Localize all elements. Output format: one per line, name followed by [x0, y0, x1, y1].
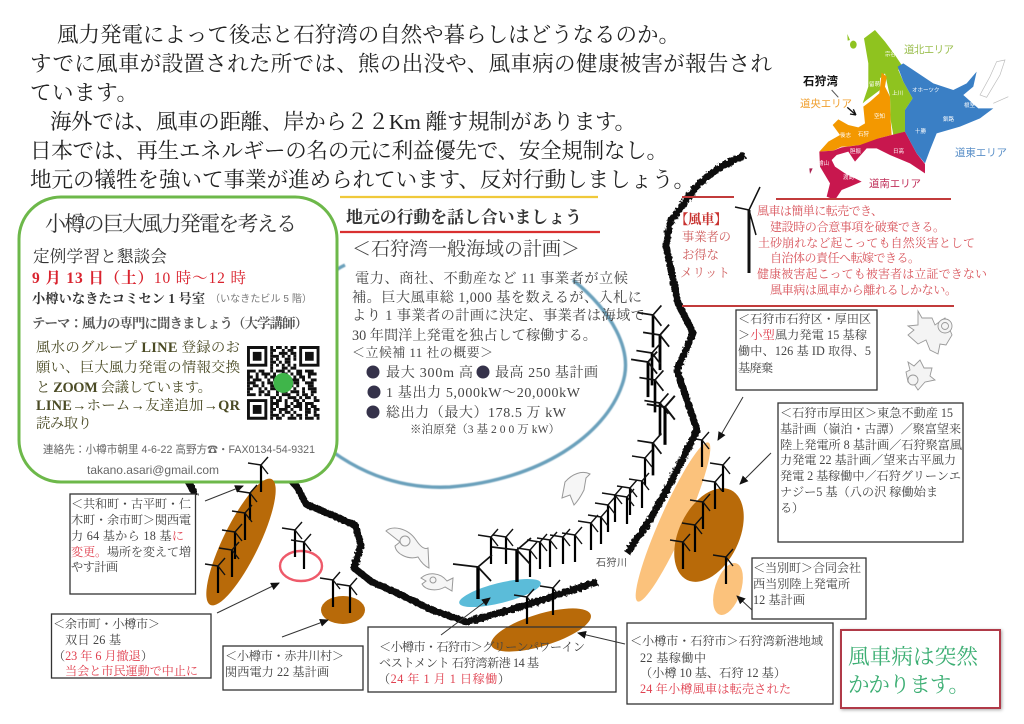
- list: candidate overview bullets: 総出力（最大）178.5 万 kW: [386, 404, 567, 421]
- wind turbines: rows of turbine glyphs: [205, 305, 733, 624]
- callout: Atsuta ward plans: 基計画（嶺泊・古譚）／聚富望来: [780, 421, 961, 436]
- text: merit label: 【風車】: [675, 211, 727, 227]
- map: Hokkaido areas: 留萌: [869, 80, 881, 88]
- text: merit details: 風車病は風車から離れるしかない。: [770, 282, 957, 297]
- callout: Atsuta ward plans: 力発電 22 基計画／望来古平風力: [780, 452, 956, 467]
- callout: Kyowa, Furubira, Niki, Yoichi: やす計画: [71, 559, 118, 574]
- text: LINE group invitation: 願い、巨大風力発電の情報交換: [36, 358, 241, 376]
- callout: Atsuta ward plans: ＜石狩市厚田区＞東急不動産 15: [780, 405, 953, 420]
- list: candidate overview bullets: 最大 300m 高: [386, 364, 473, 381]
- text: contact details: [43, 443, 315, 477]
- callout: Atsuta ward plans: [778, 403, 963, 542]
- text: merit details: 風車は簡単に転売でき、: [757, 203, 883, 218]
- map: Hokkaido areas: [800, 30, 1008, 200]
- callout: Tobetsu: 12 基計画: [753, 592, 805, 607]
- list: candidate overview bullets: [366, 364, 598, 436]
- text: contact details: 連絡先：小樽市朝里 4-6-22 高野方☎・FAX0134-54-9321: [43, 443, 315, 456]
- callout: Tobetsu: [752, 558, 866, 619]
- text: contact details: takano.asari@gmail.com: [87, 463, 219, 477]
- map: Hokkaido areas: 日高: [893, 147, 905, 155]
- map: Hokkaido areas: 上川: [892, 89, 903, 97]
- text: plan description: 電力、商社、不動産など 11 事業者が立候: [355, 270, 628, 287]
- heading text: intro statement: 海外では、風車の距離、岸から２２Km 離す規制があります。: [50, 110, 636, 134]
- text: LINE group invitation: 読み取り: [36, 414, 92, 432]
- text: plan description: 補。巨大風車総 1,000 基を数えるが、入札に: [352, 289, 642, 306]
- map: Hokkaido areas: 宗谷: [885, 50, 897, 58]
- callout: Kyowa, Furubira, Niki, Yoichi: 木町・余市町＞関西電: [71, 512, 191, 527]
- map: Hokkaido areas: オホーツク: [912, 87, 939, 94]
- area ellipses: brown existing and planned zones: [194, 437, 758, 661]
- callout: Tobetsu: 西当別陸上発電所: [753, 576, 850, 591]
- map: Hokkaido areas: 道北エリア: [904, 43, 954, 56]
- callout: small turbines in Ishikari and Atsuta: ＜石狩市石狩区・厚田区: [738, 311, 871, 326]
- callout: Atsuta ward plans: る）: [780, 501, 804, 515]
- label: Ishikari River: 石狩川: [596, 556, 627, 569]
- list: candidate overview bullets: 1 基出力 5,000kW～20,000kW: [386, 384, 581, 401]
- callout: Green Power Investment Ishikari port: ＜小樽市・石狩市＞グリーンパワーイン: [379, 639, 585, 654]
- callout: Kyowa, Furubira, Niki, Yoichi: 力 64 基から 18 基に: [71, 528, 184, 543]
- map: Hokkaido areas: 石狩湾: [803, 74, 838, 88]
- heading text: intro statement: ています。: [30, 81, 138, 105]
- text: LINE group invitation: LINE→ホーム→友達追加→QR: [36, 396, 241, 414]
- heading: Ishikari Bay plan: ＜石狩湾一般海域の計画＞: [352, 238, 580, 260]
- text: plan description: より 1 事業者の計画に決定、事業者は海域で: [352, 307, 645, 324]
- callout: Ishikari new port area: [627, 623, 833, 704]
- text: meeting date and place: テーマ：風力の専門に聞きましょう（大学講師）: [32, 315, 308, 331]
- heading text: intro statement: 日本では、再生エネルギーの名の元に利益優先で、安全規制なし。: [30, 139, 668, 163]
- callout: Green Power Investment Ishikari port: （24 年 1 月 1 日稼働）: [378, 671, 510, 686]
- arrows: callouts to zones: [205, 397, 771, 644]
- map: Hokkaido areas: 渡島: [843, 173, 855, 181]
- map: Hokkaido areas: 檜山: [818, 159, 829, 167]
- callout: small turbines in Ishikari and Atsuta: ＞小型風力発電 15 基稼: [738, 327, 867, 342]
- map: Hokkaido areas: 釧路: [943, 115, 955, 123]
- callout: windmill sickness warning: [841, 630, 1000, 708]
- text: plan description: 30 年間洋上発電を独占して稼働する。: [352, 327, 597, 344]
- map: Hokkaido areas: 道央エリア: [800, 97, 852, 110]
- callout: Yoichi and Otaru withdrawn: 双日 26 基: [65, 633, 121, 647]
- heading: panel title: 小樽の巨大風力発電を考える: [45, 212, 297, 236]
- callout: Ishikari new port area: （小樽 10 基、石狩 12 基）: [640, 665, 786, 680]
- list: candidate overview bullets: ※泊原発（3 基 2 0 0 万 kW）: [410, 422, 560, 436]
- text: plan description: ＜立候補 11 社の概要＞: [352, 345, 493, 360]
- map: Hokkaido areas: 胆振: [850, 147, 862, 155]
- text: meeting date and place: （いなきたビル 5 階）: [210, 293, 312, 305]
- text: plan description: [352, 270, 645, 360]
- icon: large wind turbine: [735, 187, 760, 273]
- map: Hokkaido areas: 道南エリア: [869, 177, 921, 190]
- map: Hokkaido areas: 十勝: [915, 127, 927, 135]
- icon: LINE QR code: [247, 346, 320, 420]
- callout: Kyowa, Furubira, Niki, Yoichi: [70, 494, 196, 594]
- callout: Ishikari new port area: ＜小樽市・石狩市＞石狩湾新港地域: [630, 633, 823, 648]
- heading text: intro statement: 地元の犠牲を強いて事業が進められています、反対行動しましょう。: [30, 168, 695, 192]
- callout: Ishikari new port area: 24 年小樽風車は転売された: [640, 681, 791, 696]
- text: merit details: 土砂崩れなど起こっても自然災害として: [758, 235, 975, 250]
- callout: Yoichi and Otaru withdrawn: ＜余市町・小樽市＞: [53, 616, 160, 631]
- icon: fish sketches: [386, 472, 590, 591]
- panel: study meeting announcement: [19, 197, 337, 482]
- text: LINE group invitation: と ZOOM 会議しています。: [36, 379, 212, 396]
- callout: small turbines in Ishikari and Atsuta: 働中、126 基 ID 取得、5: [738, 343, 871, 358]
- text: meeting date and place: 9 月 13 日（土）10 時～12 時: [32, 268, 246, 287]
- map: Hokkaido areas: 道東エリア: [955, 146, 1007, 159]
- text: LINE group invitation: [36, 339, 241, 432]
- text: merit label: お得な: [682, 248, 719, 262]
- callout: Otaru and Akaigawa: ＜小樽市・赤井川村＞: [225, 648, 344, 663]
- list: candidate overview bullets: 最高 250 基計画: [495, 364, 598, 381]
- callout: Kyowa, Furubira, Niki, Yoichi: ＜共和町・古平町・仁: [71, 496, 191, 511]
- callout: small turbines in Ishikari and Atsuta: [736, 310, 877, 390]
- text: merit label: [675, 211, 731, 280]
- heading text: intro statement: [30, 23, 772, 192]
- icon: leaf and snail sketches: [906, 311, 952, 390]
- callout: Yoichi and Otaru withdrawn: 当会と市民運動で中止に: [65, 663, 198, 678]
- callout: Otaru and Akaigawa: 関西電力 22 基計画: [225, 664, 329, 679]
- panel: local action and Ishikari Bay plan: [340, 197, 645, 436]
- panel: turbine operator merits: [675, 187, 987, 306]
- map: Hokkaido areas: 石狩: [858, 130, 870, 138]
- text: merit label: メリット: [680, 266, 730, 280]
- callout: small turbines in Ishikari and Atsuta: 基廃棄: [738, 360, 773, 375]
- callout: Green Power Investment Ishikari port: [368, 627, 616, 692]
- map: Hokkaido areas: 後志: [840, 131, 852, 139]
- callout: Otaru and Akaigawa: [223, 646, 363, 690]
- callout: Ishikari new port area: 22 基稼働中: [640, 650, 706, 665]
- coastline: thick rough black shore: [187, 155, 745, 622]
- callout: windmill sickness warning: かかります。: [848, 673, 970, 697]
- heading text: intro statement: 風力発電によって後志と石狩湾の自然や暮らしはどうなるのか。: [57, 23, 680, 47]
- map: Hokkaido areas: 空知: [874, 112, 885, 120]
- callout: Atsuta ward plans: 陸上発電所 8 基計画／石狩聚富風: [780, 437, 962, 452]
- text: merit details: 建設時の合意事項を破棄できる。: [770, 219, 945, 234]
- callout: windmill sickness warning: 風車病は突然: [848, 645, 978, 669]
- callout: Atsuta ward plans: ナジー5 基（八の沢 稼働始ま: [780, 485, 938, 499]
- callout: Tobetsu: ＜当別町＞合同会社: [753, 560, 861, 575]
- text: meeting date and place: 小樽いなきたコミセン 1 号室: [32, 290, 205, 306]
- text: meeting date and place: 定例学習と懇談会: [33, 247, 167, 266]
- callout: Yoichi and Otaru withdrawn: [52, 614, 211, 678]
- map: Hokkaido areas: 根室: [964, 101, 976, 109]
- text: merit details: 健康被害起こっても被害者は立証できない: [757, 266, 987, 281]
- blue arc: Ishikari Bay outline: [283, 265, 625, 487]
- heading: local action: 地元の行動を話し合いましょう: [346, 207, 582, 227]
- callout: Atsuta ward plans: 発電 2 基稼働中／石狩グリーンエ: [780, 468, 961, 483]
- text: merit label: 事業者の: [682, 229, 731, 244]
- text: LINE group invitation: 風水のグループ LINE 登録のお: [36, 339, 240, 356]
- callout: Yoichi and Otaru withdrawn: （23 年 6 月撤退）: [53, 648, 153, 663]
- text: merit details: 自治体の責任へ転嫁できる。: [770, 250, 920, 265]
- text: meeting date and place: [32, 247, 312, 331]
- callout: Kyowa, Furubira, Niki, Yoichi: 変更。場所を変えて増: [71, 544, 191, 559]
- callout: Green Power Investment Ishikari port: ベストメント 石狩湾新港 14 基: [379, 655, 539, 670]
- heading text: intro statement: すでに風車が設置された所では、熊の出没や、風車病の健康被害が報告され: [30, 52, 772, 76]
- text: merit details: [757, 203, 987, 297]
